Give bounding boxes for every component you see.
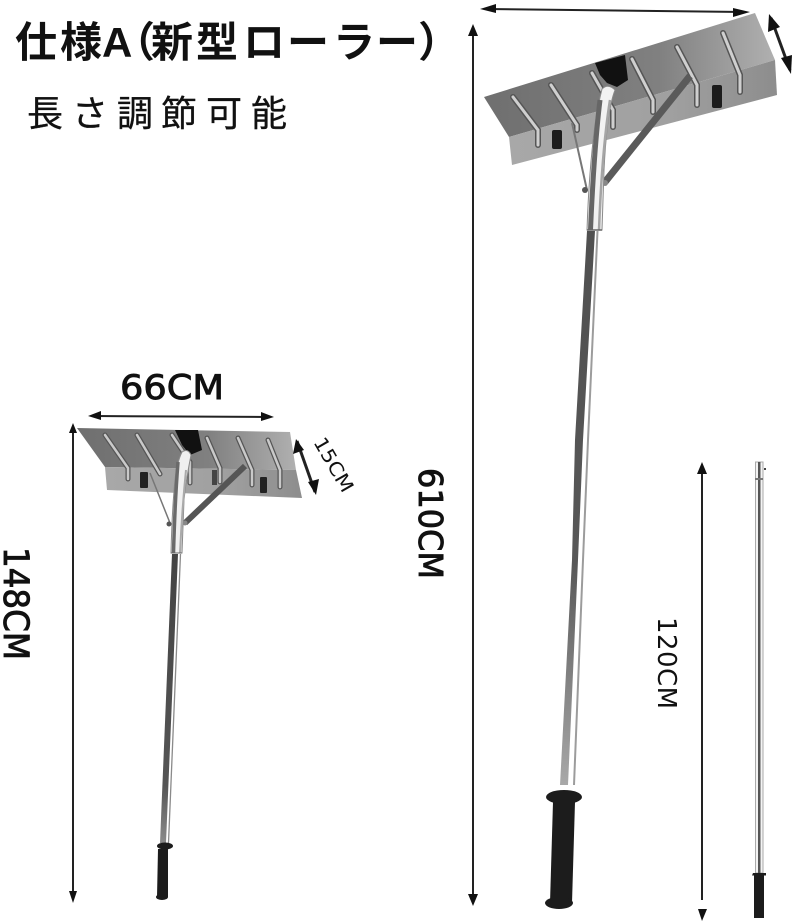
thin pole: extension section xyxy=(752,462,766,918)
pole grip xyxy=(752,873,766,918)
upper shaft xyxy=(587,86,615,230)
arrow: top depth xyxy=(768,14,792,74)
label: 15CM: 15CM xyxy=(309,434,358,496)
mount bracket xyxy=(175,430,202,455)
small rake: collapsed tool xyxy=(77,428,302,900)
blade upper panel xyxy=(484,13,775,137)
mount bracket xyxy=(595,55,628,87)
brace xyxy=(602,76,690,186)
arrow: 120CM height xyxy=(697,462,707,921)
blade slots xyxy=(513,33,740,145)
brace xyxy=(182,466,245,526)
wire strut xyxy=(150,473,172,526)
arrow: 15CM depth xyxy=(293,439,319,495)
title: 仕様A（新型ローラー） xyxy=(15,19,460,66)
lower shaft xyxy=(160,554,180,843)
arrow: top width xyxy=(480,4,750,17)
blade clips xyxy=(140,470,267,493)
pole body xyxy=(756,462,763,873)
lower shaft xyxy=(560,231,598,785)
blade slots xyxy=(105,435,280,487)
arrow: 148CM height xyxy=(69,423,77,903)
subtitle: 長さ調節可能 xyxy=(27,93,287,134)
blade clips xyxy=(552,85,722,149)
upper shaft xyxy=(171,451,191,553)
label: 66CM: 66CM xyxy=(120,368,224,408)
arrow: 66CM width xyxy=(88,411,274,421)
blade lower panel xyxy=(105,467,302,498)
grip xyxy=(545,790,582,909)
big rake: extended tool xyxy=(484,13,777,909)
blade upper panel xyxy=(77,428,296,470)
label: 120CM: 120CM xyxy=(651,617,681,709)
label: 610CM: 610CM xyxy=(411,468,450,579)
wire strut xyxy=(572,123,588,193)
arrow: 610CM height xyxy=(468,24,478,906)
grip xyxy=(156,842,173,900)
blade lower panel xyxy=(509,60,777,165)
